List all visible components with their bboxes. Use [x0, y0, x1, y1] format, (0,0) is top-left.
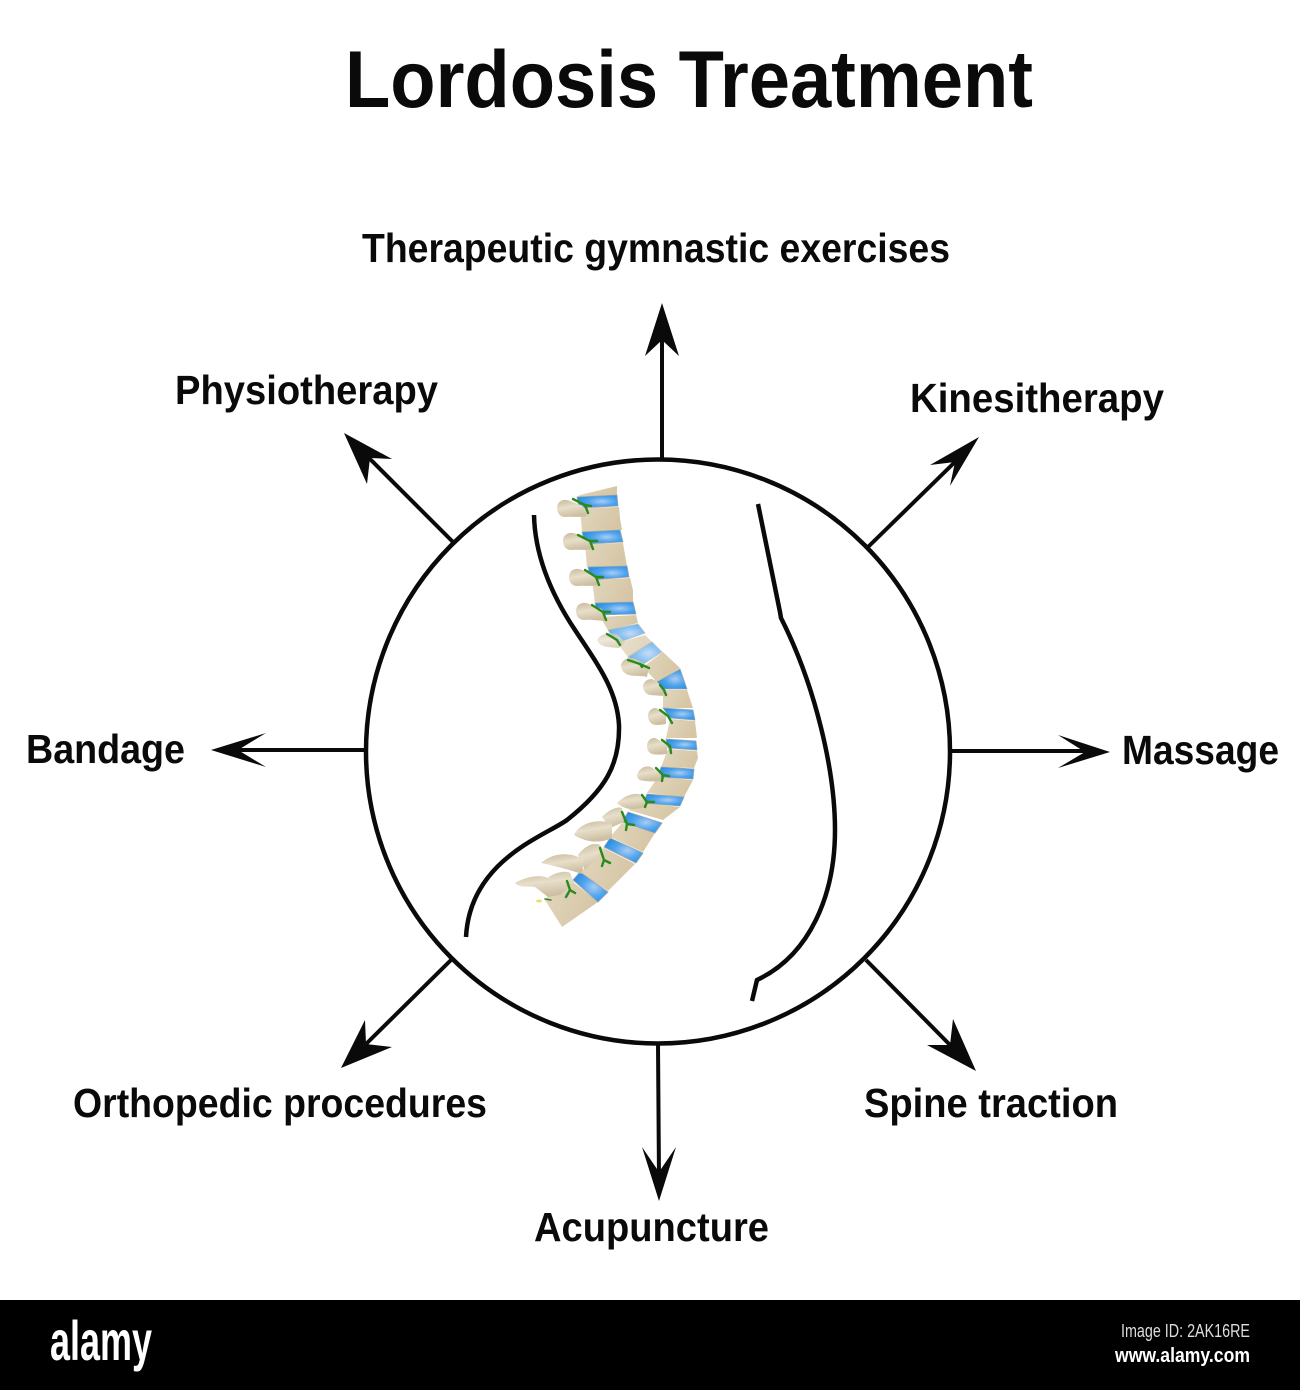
body outline: back	[752, 504, 835, 1001]
arrow: down right	[866, 960, 976, 1071]
arrow: down left	[341, 960, 451, 1068]
label: Orthopedic procedures: Orthopedic procedures	[73, 1080, 487, 1126]
body outline: front	[466, 515, 619, 937]
arrow: up left	[344, 433, 454, 543]
arrow: up	[645, 303, 679, 458]
yellow marking	[536, 900, 542, 902]
footer bar	[0, 1300, 1300, 1390]
arrow: down	[642, 1044, 676, 1201]
arrow: up right	[868, 437, 979, 547]
website: www.alamy.com	[1114, 1345, 1250, 1367]
spinous processes	[515, 500, 667, 897]
arrow: right	[951, 735, 1110, 768]
label: Massage: Massage	[1122, 727, 1279, 773]
central circle	[366, 460, 950, 1044]
title: Lordosis Treatment	[345, 35, 1033, 125]
spine illustration	[515, 486, 698, 927]
intervertebral discs	[573, 495, 697, 902]
label: Physiotherapy: Physiotherapy	[175, 367, 438, 413]
vertebral bodies	[545, 486, 698, 927]
footer logo: alamy	[50, 1309, 152, 1372]
label: Spine traction: Spine traction	[864, 1080, 1118, 1126]
spinal nerves	[545, 499, 672, 900]
label: Bandage: Bandage	[26, 726, 185, 772]
label: Acupuncture: Acupuncture	[534, 1204, 769, 1250]
arrow: left	[211, 733, 365, 767]
image id: Image ID: 2AK16RE	[1121, 1321, 1250, 1341]
label: Kinesitherapy: Kinesitherapy	[910, 375, 1164, 421]
label: Therapeutic gymnastic exercises: Therapeutic gymnastic exercises	[362, 225, 950, 271]
